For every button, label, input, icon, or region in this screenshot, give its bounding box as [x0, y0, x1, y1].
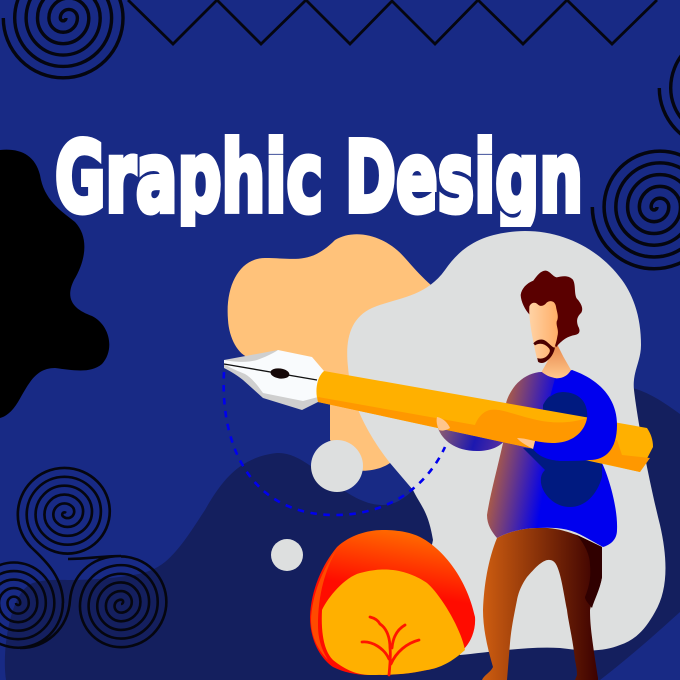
triskele spirals	[0, 449, 166, 648]
character	[224, 271, 653, 680]
dark background wave	[5, 380, 680, 680]
pen nib	[224, 350, 324, 410]
gray blob	[347, 231, 665, 655]
spiral: top right	[659, 34, 680, 148]
neck	[542, 340, 571, 378]
spiral: right	[592, 151, 680, 269]
pen body	[316, 371, 653, 472]
zigzag line	[128, 0, 657, 44]
chest shadow	[543, 392, 587, 425]
title: Graphic	[55, 121, 323, 234]
belly shadow	[523, 448, 602, 507]
hair	[521, 271, 582, 347]
face	[529, 301, 558, 363]
peach blob	[228, 234, 452, 471]
black blob	[0, 150, 109, 418]
spiral: top left	[3, 0, 123, 78]
circle: large	[311, 440, 363, 492]
pants	[482, 528, 602, 680]
torso	[487, 370, 617, 547]
dashed arc	[224, 372, 445, 515]
beard	[533, 340, 555, 363]
left arm	[438, 428, 505, 451]
hands	[437, 417, 535, 449]
sleeve	[533, 370, 617, 461]
circle: small	[271, 539, 303, 571]
illustrated bush	[310, 530, 475, 675]
title	[56, 134, 580, 227]
